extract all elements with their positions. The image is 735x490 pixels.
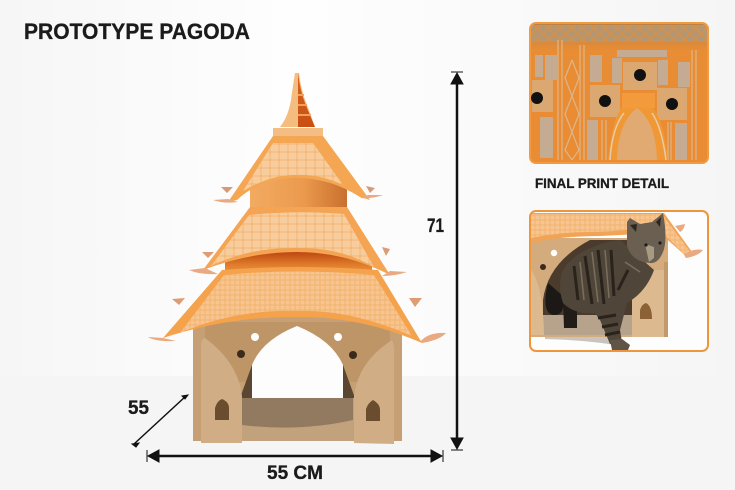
- panel: cat photo: [530, 211, 708, 351]
- cardboard house: [531, 238, 668, 337]
- panel: final print detail photo: [530, 23, 708, 163]
- width label: 55 CM: [267, 463, 323, 484]
- lattice band: [531, 25, 707, 42]
- cardboard base: [193, 315, 402, 444]
- upper wall and middle roof: [189, 175, 407, 276]
- arched opening: [252, 326, 343, 398]
- title: PROTOTYPE PAGODA: [24, 19, 250, 44]
- caption: FINAL PRINT DETAIL: [535, 175, 669, 191]
- lower roof: [148, 250, 446, 343]
- depth label: 55: [128, 398, 149, 419]
- roof: [531, 213, 692, 258]
- shadow on floor: [545, 337, 611, 344]
- arch motif: [608, 107, 668, 160]
- pagoda model: [148, 73, 446, 444]
- height label: 71: [427, 216, 444, 237]
- top roof: [213, 136, 383, 203]
- spire: [273, 73, 323, 136]
- height arrow: [451, 72, 463, 450]
- depth arrow: [132, 395, 188, 447]
- width arrow: [147, 450, 443, 462]
- cat: [545, 213, 666, 350]
- front pillars: [201, 338, 242, 443]
